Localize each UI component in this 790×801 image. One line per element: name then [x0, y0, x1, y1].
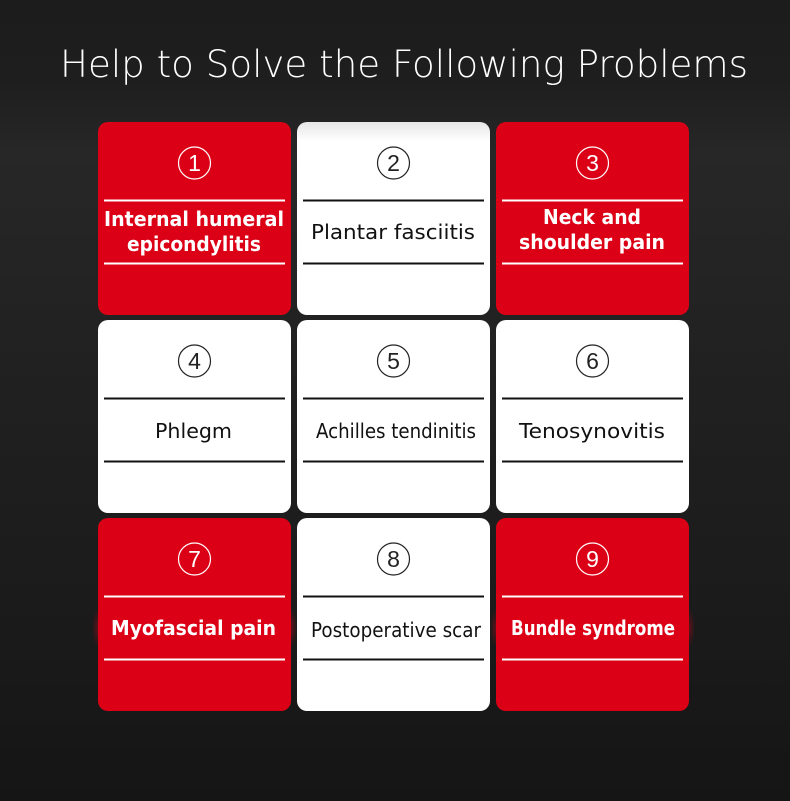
panel 8: postoperative scar: [297, 518, 490, 711]
panel 3: neck and shoulder pain: [496, 122, 689, 315]
label 3: Neck and: [543, 205, 641, 229]
number 5: [378, 345, 410, 377]
number 9: 9: [586, 546, 599, 572]
number 4: [178, 345, 210, 377]
number 1: 1: [188, 150, 201, 176]
label 4: Phlegm: [155, 419, 232, 443]
panel 1: internal humeral epicondylitis: [98, 122, 291, 315]
number 1: [178, 147, 210, 179]
glow behind row three: [92, 608, 695, 648]
panel 4: phlegm: [98, 320, 291, 513]
number 6: 6: [586, 348, 599, 374]
number 7: 7: [188, 546, 201, 572]
number 3: 3: [586, 150, 599, 176]
number 6: [576, 345, 608, 377]
label 1: epicondylitis: [127, 232, 261, 256]
label 9: Bundle syndrome: [511, 616, 675, 640]
label 1: [104, 207, 284, 256]
panel 2: plantar fasciitis: [297, 122, 490, 315]
label 5: Achilles tendinitis: [316, 419, 476, 443]
number 8: [378, 543, 410, 575]
panel 9: bundle syndrome: [496, 518, 689, 711]
panel 5: achilles tendinitis: [297, 320, 490, 513]
title: Help to Solve the Following Problems: [60, 42, 748, 86]
number 7: [178, 543, 210, 575]
panel 7: myofascial pain: [98, 518, 291, 711]
number 3: [576, 147, 608, 179]
label 6: Tenosynovitis: [518, 419, 665, 443]
number 9: [576, 543, 608, 575]
panel 6: tenosynovitis: [496, 320, 689, 513]
number 8: 8: [387, 546, 400, 572]
number 2: [378, 147, 410, 179]
label 3: shoulder pain: [519, 230, 665, 254]
number 2: 2: [387, 150, 400, 176]
label 1: Internal humeral: [104, 207, 284, 231]
number 4: 4: [188, 348, 201, 374]
label 7: Myofascial pain: [111, 616, 276, 640]
label 8: Postoperative scar: [311, 618, 481, 642]
label 3: [519, 205, 665, 254]
number 5: 5: [387, 348, 400, 374]
label 2: Plantar fasciitis: [311, 220, 475, 244]
